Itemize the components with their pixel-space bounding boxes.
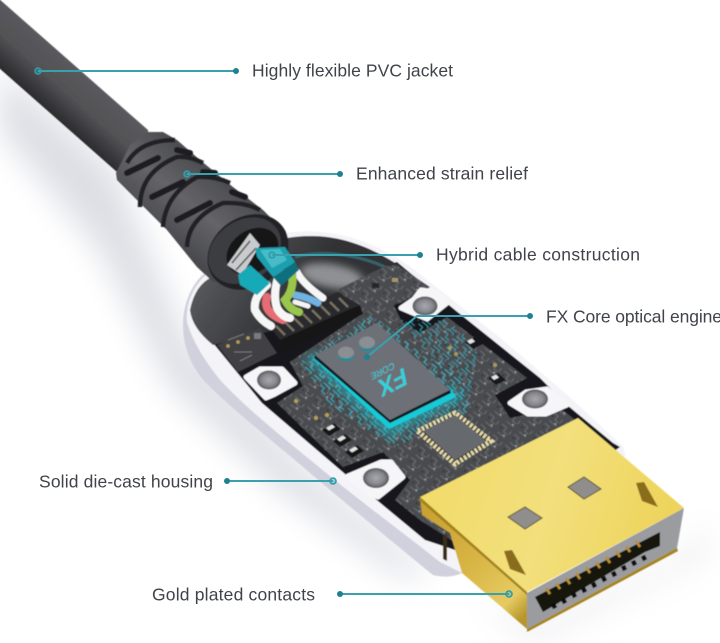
shell top face [187,232,625,573]
callout: housing: Solid die-cast housing [39,472,213,492]
wire header [270,292,363,352]
spring tab left [504,550,526,575]
cavity wall [190,236,430,345]
upper right board [337,265,430,315]
callout: optical engine [364,306,720,360]
rear cavity reflection [298,259,366,293]
callout: housing [39,472,336,492]
FX Core chip [314,323,451,423]
housing shell [183,232,625,577]
chip lens right [359,336,375,351]
spring tab right [636,482,658,507]
small board left [217,328,277,372]
contact slot [535,532,660,612]
strain relief boot [116,132,303,305]
callout: strain relief [184,164,528,184]
gold DisplayPort plug [419,418,684,632]
boot collar [193,199,303,305]
circuit boards [217,265,610,552]
plug front [527,508,684,629]
plug top [420,418,684,592]
mounting tabs [246,290,567,497]
chip logo CORE: CORE [370,360,395,382]
callout: gold contacts: Gold plated contacts [152,584,315,604]
plug side [420,497,527,629]
bay black base [213,262,620,555]
callout: hybrid construction [269,244,640,264]
main board [277,302,610,552]
callout: gold contacts [152,584,512,604]
surface-mount parts [294,278,506,458]
cavity teal reflection [295,254,395,272]
chip lens left [338,346,354,361]
teal trace field [300,315,472,447]
callout: jacket: Highly flexible PVC jacket [252,60,453,80]
latch hole left [508,507,542,529]
cyan chip glow [304,352,466,438]
latch hole right [568,477,601,499]
chip logo FX: FX [375,361,409,402]
control chip [418,413,491,464]
callout: optical engine: FX Core optical engine [546,306,720,326]
callout: hybrid construction: Hybrid cable construction [436,244,640,264]
cable core [227,233,299,295]
cable jacket [0,0,150,172]
colored wires [255,263,323,326]
callout: jacket [35,60,453,80]
shell side band [183,232,625,577]
callout: strain relief: Enhanced strain relief [356,164,528,184]
